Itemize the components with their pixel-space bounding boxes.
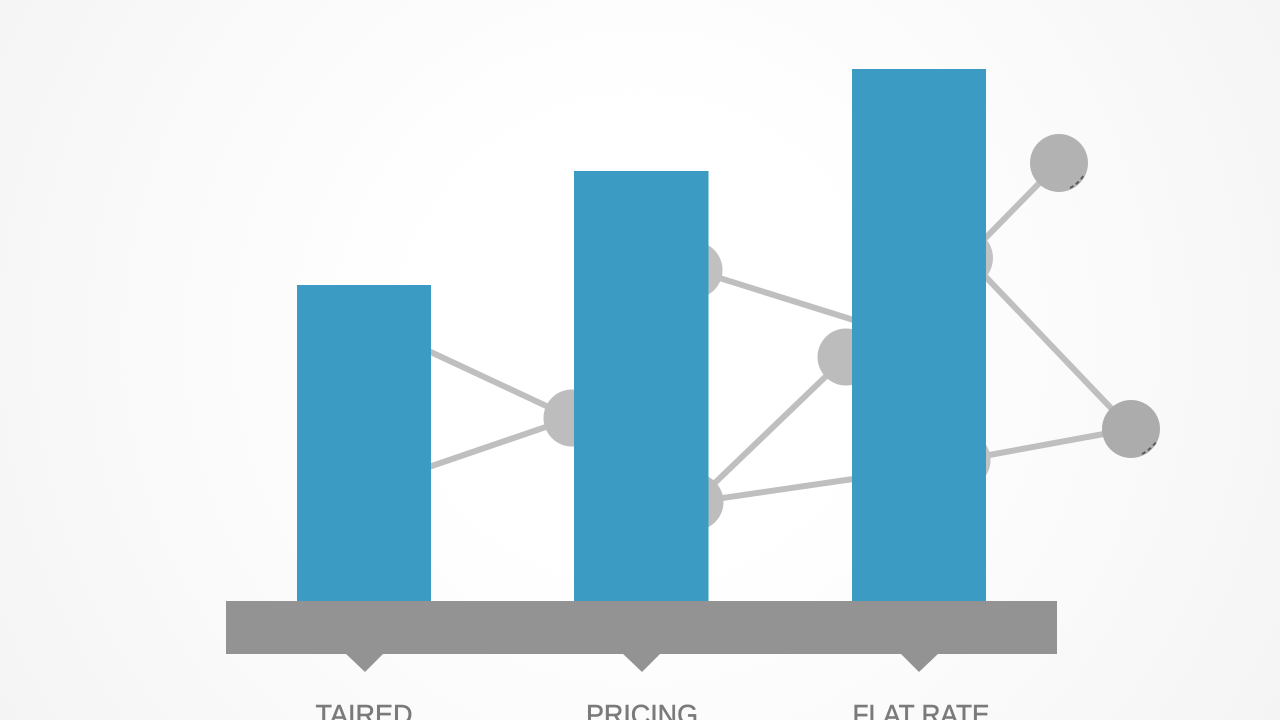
bar: taired [297,285,431,603]
bar: pricing [574,171,708,603]
base platform with pointers [226,601,1057,672]
node network behind bars [420,134,1160,530]
node circles [544,390,600,446]
bar: flat rate [852,69,986,603]
connector lines [420,163,1131,502]
node shadow flecks [1070,175,1084,188]
